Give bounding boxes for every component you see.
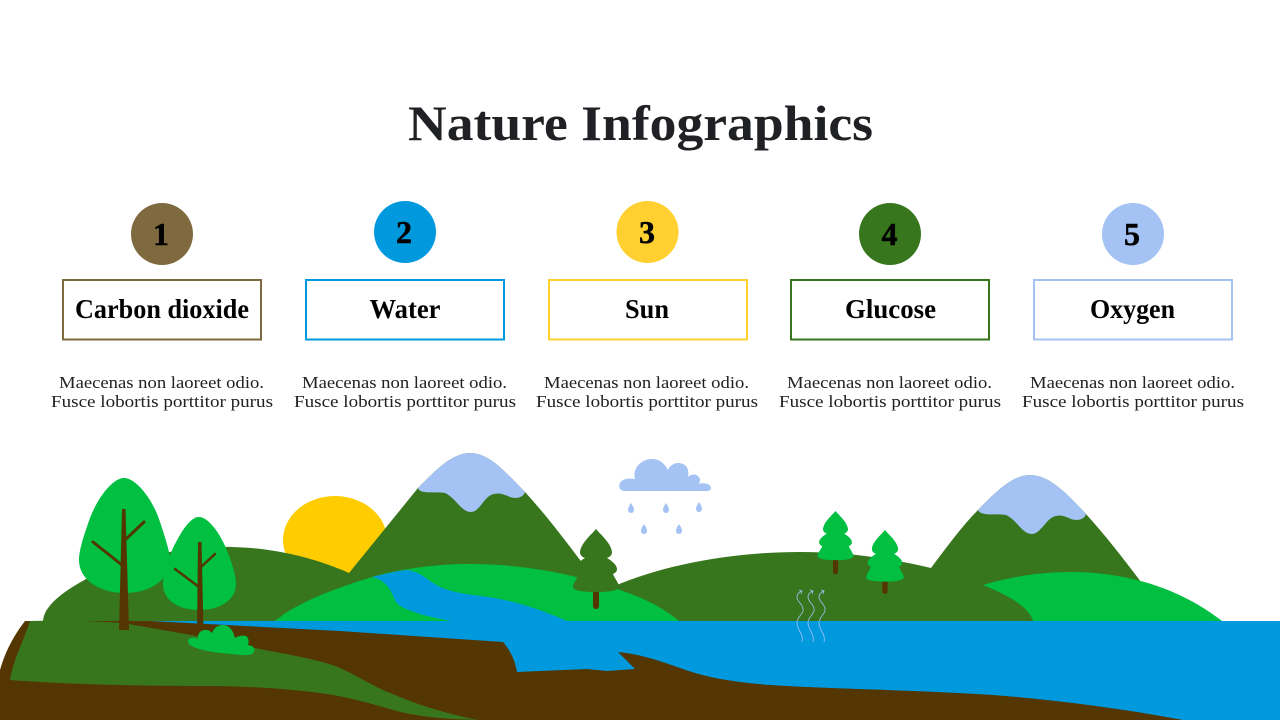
description 2: Maecenas non laoreet odio. bbox=[302, 373, 507, 392]
landscape illustration bbox=[0, 453, 1280, 720]
number badge 2 bbox=[374, 201, 436, 263]
number badge 5: 5 bbox=[1124, 216, 1140, 252]
snow cap bbox=[978, 475, 1086, 534]
description 1: Maecenas non laoreet odio. bbox=[59, 373, 264, 392]
left green hill bbox=[275, 564, 679, 621]
step 3: sun bbox=[536, 201, 758, 411]
label box: carbon dioxide bbox=[63, 280, 261, 340]
step 5: oxygen bbox=[1022, 203, 1244, 411]
label box: oxygen: Oxygen bbox=[1090, 294, 1175, 324]
left back hill bbox=[43, 547, 420, 621]
icon: rain cloud bbox=[619, 459, 711, 534]
description 3 bbox=[536, 373, 758, 411]
snow cap bbox=[418, 453, 525, 512]
number badge 1 bbox=[131, 203, 193, 265]
number badge 3: 3 bbox=[639, 214, 655, 250]
description 5: Maecenas non laoreet odio. bbox=[1030, 373, 1235, 392]
right mountain bbox=[930, 475, 1160, 621]
middle right hill bbox=[605, 552, 1040, 621]
icon: big tree bbox=[79, 478, 170, 630]
number badge 3 bbox=[616, 201, 678, 263]
icon: light pine tree two bbox=[866, 530, 904, 594]
description 1 bbox=[51, 373, 273, 411]
number badge 5 bbox=[1102, 203, 1164, 265]
description 2: Fusce lobortis porttitor purus bbox=[294, 392, 516, 411]
label box: water: Water bbox=[370, 294, 441, 324]
label box: sun: Sun bbox=[625, 294, 669, 324]
title: Nature Infographics bbox=[408, 95, 873, 151]
description 1: Fusce lobortis porttitor purus bbox=[51, 392, 273, 411]
description 5 bbox=[1022, 373, 1244, 411]
number badge 4: 4 bbox=[882, 216, 898, 252]
label box: glucose bbox=[791, 280, 989, 340]
brown land bbox=[0, 621, 1183, 720]
label box: carbon dioxide: Carbon dioxide bbox=[75, 294, 249, 324]
label box: oxygen bbox=[1034, 280, 1232, 340]
step 1: carbon dioxide bbox=[51, 203, 273, 411]
number badge 4 bbox=[859, 203, 921, 265]
green land bbox=[10, 621, 478, 720]
label box: sun bbox=[549, 280, 747, 340]
number badge 2: 2 bbox=[396, 214, 412, 250]
icon: bush bbox=[188, 625, 254, 655]
label box: water bbox=[306, 280, 504, 340]
description 4: Fusce lobortis porttitor purus bbox=[779, 392, 1001, 411]
description 5: Fusce lobortis porttitor purus bbox=[1022, 392, 1244, 411]
label box: glucose: Glucose bbox=[845, 294, 936, 324]
left mountain bbox=[300, 453, 615, 621]
step 4: glucose bbox=[779, 203, 1001, 411]
lake bbox=[120, 621, 1280, 720]
icon: small tree bbox=[163, 517, 236, 632]
description 4 bbox=[779, 373, 1001, 411]
description 3: Maecenas non laoreet odio. bbox=[544, 373, 749, 392]
icon: evaporation arrows bbox=[797, 590, 825, 642]
description 4: Maecenas non laoreet odio. bbox=[787, 373, 992, 392]
description 2 bbox=[294, 373, 516, 411]
description 3: Fusce lobortis porttitor purus bbox=[536, 392, 758, 411]
step 2: water bbox=[294, 201, 516, 411]
icon: light pine tree one bbox=[818, 511, 853, 574]
icon: dark pine tree bbox=[573, 529, 619, 609]
right green hill bbox=[983, 572, 1222, 621]
river bbox=[372, 570, 567, 640]
number badge 1: 1 bbox=[153, 216, 169, 252]
icon: sun bbox=[283, 496, 387, 584]
